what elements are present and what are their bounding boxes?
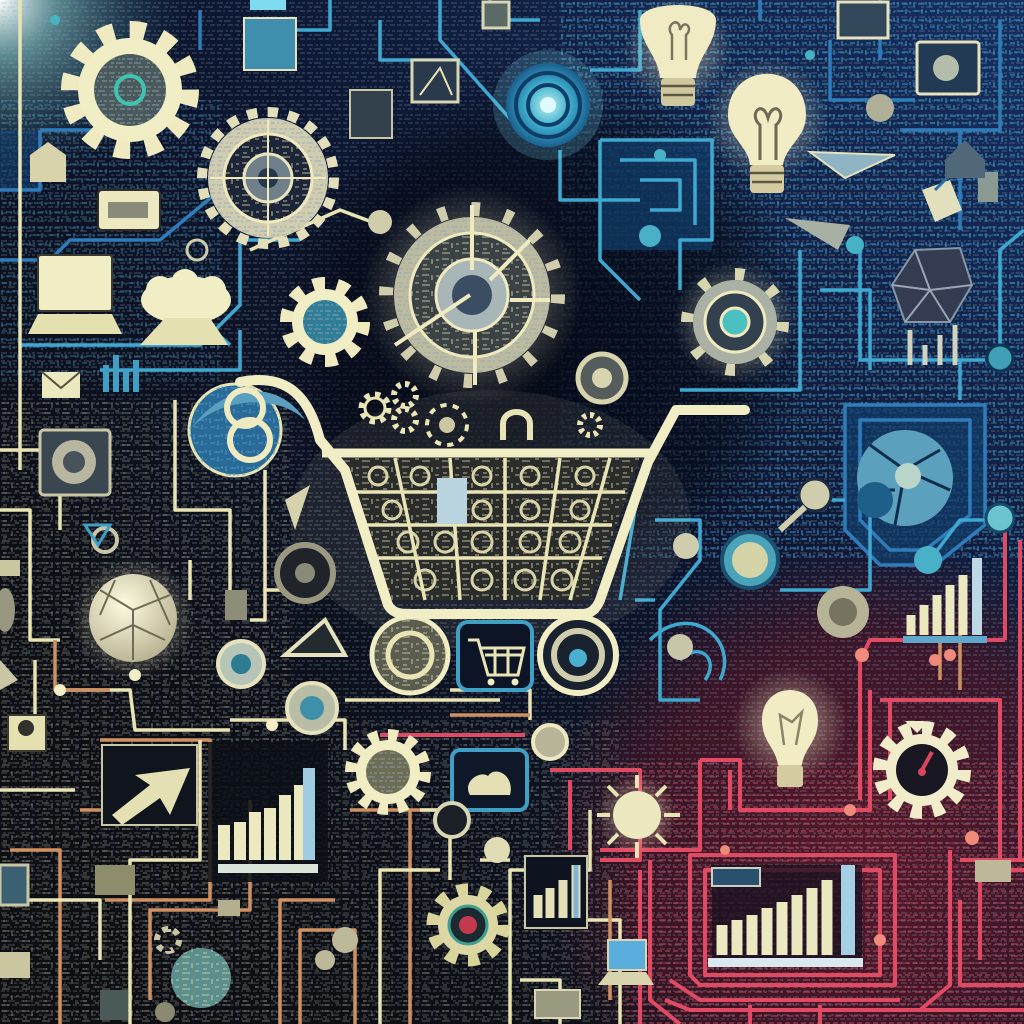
cart cell icons xyxy=(369,467,594,590)
icon: white faceted globe xyxy=(71,556,195,680)
cart small chart xyxy=(437,478,467,524)
icon: shopping cart xyxy=(240,380,745,693)
chart: bars left xyxy=(208,742,328,882)
icon: cream gear center left xyxy=(287,284,363,360)
icon: teal spiral xyxy=(493,50,603,160)
icon: large cream gear bottom xyxy=(352,736,424,808)
icon: bulb lower right xyxy=(732,667,848,787)
icon: small gears cluster xyxy=(362,354,626,445)
icon: glowing gear right xyxy=(673,260,797,384)
icon: globe with chain beside cart xyxy=(189,384,305,476)
icon: envelope xyxy=(42,372,80,398)
icon: camera xyxy=(40,430,110,495)
icon: top-left gear xyxy=(70,30,190,150)
circuit lines: blue network xyxy=(0,0,1024,700)
cart grid xyxy=(352,458,625,600)
icon: lower-left and bottom cluster xyxy=(95,803,1011,1022)
icon: left edge devices xyxy=(0,560,46,978)
icon: house box xyxy=(30,142,66,182)
chart: bars upper red zone xyxy=(903,558,987,643)
circuit lines: cream and orange network xyxy=(0,0,620,1024)
icon: bulb second xyxy=(705,58,829,193)
icon: monitors top right xyxy=(838,2,985,190)
icon: orbs on the right xyxy=(639,149,1014,660)
panel: blue screen tiles xyxy=(0,130,985,565)
right wheel xyxy=(540,617,616,693)
cart frame xyxy=(240,380,745,614)
icon: small blue laptop xyxy=(598,940,654,985)
icon: triangle and lens group xyxy=(85,485,567,759)
circuit lines: red network xyxy=(380,530,1024,1024)
icon: ornate gear upper left xyxy=(202,112,334,244)
icon: small blue bars xyxy=(106,355,136,392)
rock bars xyxy=(910,325,955,365)
icon: sun gear xyxy=(597,775,680,858)
icon: bulb top xyxy=(623,0,733,106)
left wheel xyxy=(372,617,448,693)
icon: people cluster xyxy=(140,269,231,345)
icon: pill-shaped box xyxy=(98,190,160,230)
icon: blue faceted globe xyxy=(857,430,953,526)
icon: paper plane shapes xyxy=(785,152,998,250)
chart: bars in red frame xyxy=(708,865,863,967)
icon: arrow tile xyxy=(102,745,197,825)
icon: laptop xyxy=(28,255,122,334)
icon: gear lower right xyxy=(880,728,964,812)
chart: bars middle xyxy=(525,856,587,928)
icon: top center frames xyxy=(244,0,509,138)
icon: small cart tile xyxy=(458,622,532,690)
icon: rock crystal xyxy=(892,248,972,365)
icon: gear with red center xyxy=(433,890,503,960)
icon: big central gear xyxy=(362,185,582,405)
cart basket interior xyxy=(335,458,640,600)
icon: cloud tile xyxy=(452,750,527,810)
cart top handle xyxy=(503,412,530,440)
